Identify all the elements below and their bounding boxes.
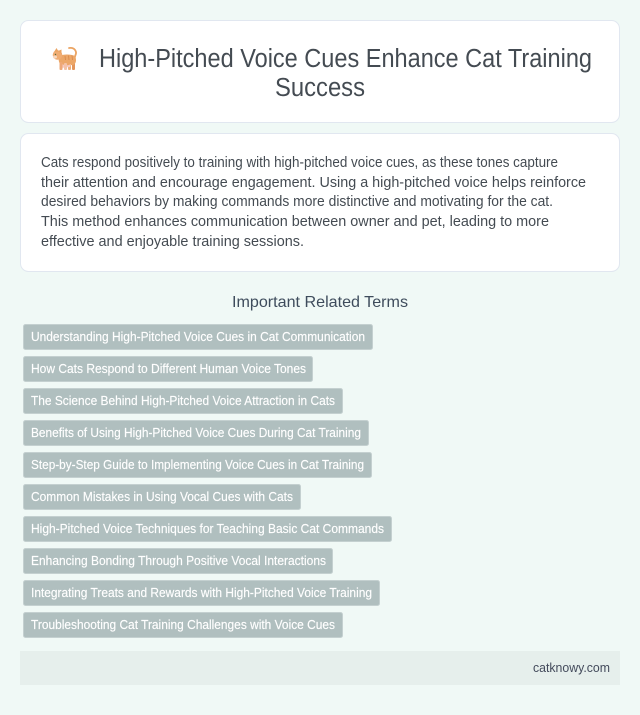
tag 3 [24, 388, 342, 414]
description text: desired behaviors by making commands more distinctive and motivating for the cat. [41, 194, 553, 210]
tag 1: Understanding High-Pitched Voice Cues in Cat Communication [31, 330, 365, 344]
tag 3: The Science Behind High-Pitched Voice Attraction in Cats [31, 394, 335, 408]
title [99, 45, 592, 102]
tag 6 [24, 484, 300, 510]
tag list [24, 324, 392, 638]
heading: related terms: Important Related Terms [232, 294, 408, 311]
tag 8 [24, 548, 332, 574]
description text: their attention and encourage engagement. Using a high-pitched voice helps reinforce [41, 175, 586, 191]
tag 5 [24, 452, 372, 478]
tag 9: Integrating Treats and Rewards with High-Pitched Voice Training [31, 586, 372, 600]
tag 7 [24, 516, 392, 542]
title: Success [275, 74, 365, 102]
panel: title card [20, 20, 620, 122]
description text: effective and enjoyable training sessions. [41, 234, 304, 250]
tag 10: Troubleshooting Cat Training Challenges with Voice Cues [31, 618, 335, 632]
tag 8: Enhancing Bonding Through Positive Vocal Interactions [31, 554, 326, 568]
description text: Cats respond positively to training with high-pitched voice cues, as these tones capture [41, 155, 558, 171]
description text [41, 155, 586, 250]
panel: description [20, 134, 620, 272]
footer bar [20, 651, 620, 685]
tag 6: Common Mistakes in Using Vocal Cues with Cats [31, 490, 293, 504]
tag 4: Benefits of Using High-Pitched Voice Cues During Cat Training [31, 426, 361, 440]
tag 2: How Cats Respond to Different Human Voice Tones [31, 362, 306, 376]
description text: This method enhances communication between owner and pet, leading to more [41, 214, 549, 230]
tag 10 [24, 612, 342, 638]
icon: cat [53, 48, 76, 70]
tag 4 [24, 420, 368, 446]
tag 5: Step-by-Step Guide to Implementing Voice Cues in Cat Training [31, 458, 364, 472]
tag 7: High-Pitched Voice Techniques for Teaching Basic Cat Commands [31, 522, 384, 536]
footer text: catknowy.com [533, 661, 610, 675]
tag 9 [24, 580, 380, 606]
tag 1 [24, 324, 372, 350]
title: High-Pitched Voice Cues Enhance Cat Training [99, 45, 592, 73]
tag 2 [24, 356, 312, 382]
